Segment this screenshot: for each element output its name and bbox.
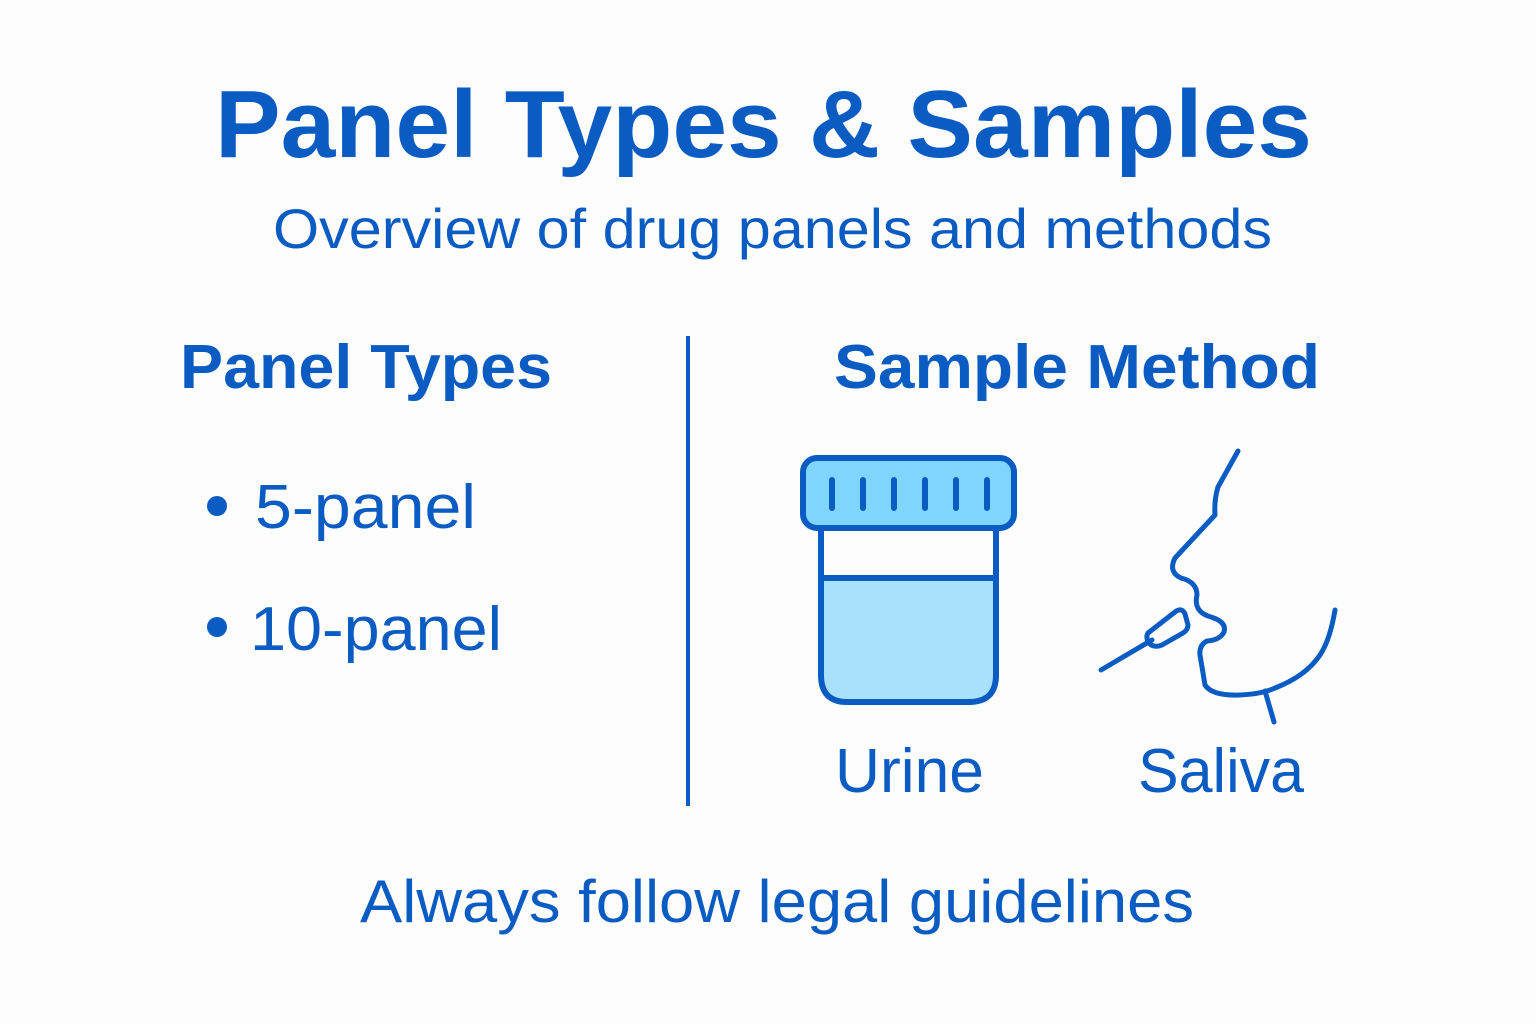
- heading: sample method: Sample Method: [834, 333, 1320, 402]
- subtitle: Overview of drug panels and methods: [273, 197, 1272, 260]
- icon: urine cup: [803, 458, 1014, 702]
- heading: panel types: Panel Types: [180, 333, 552, 402]
- footer note: Always follow legal guidelines: [360, 868, 1194, 935]
- label: saliva: Saliva: [1138, 737, 1305, 806]
- list: panel types: 10-panel: [250, 595, 502, 664]
- title: Panel Types & Samples: [215, 71, 1312, 178]
- label: urine: Urine: [835, 737, 984, 806]
- list: panel types: 5-panel: [255, 473, 476, 542]
- icon: saliva face with swab: [1101, 451, 1335, 722]
- list: panel types: [207, 473, 502, 664]
